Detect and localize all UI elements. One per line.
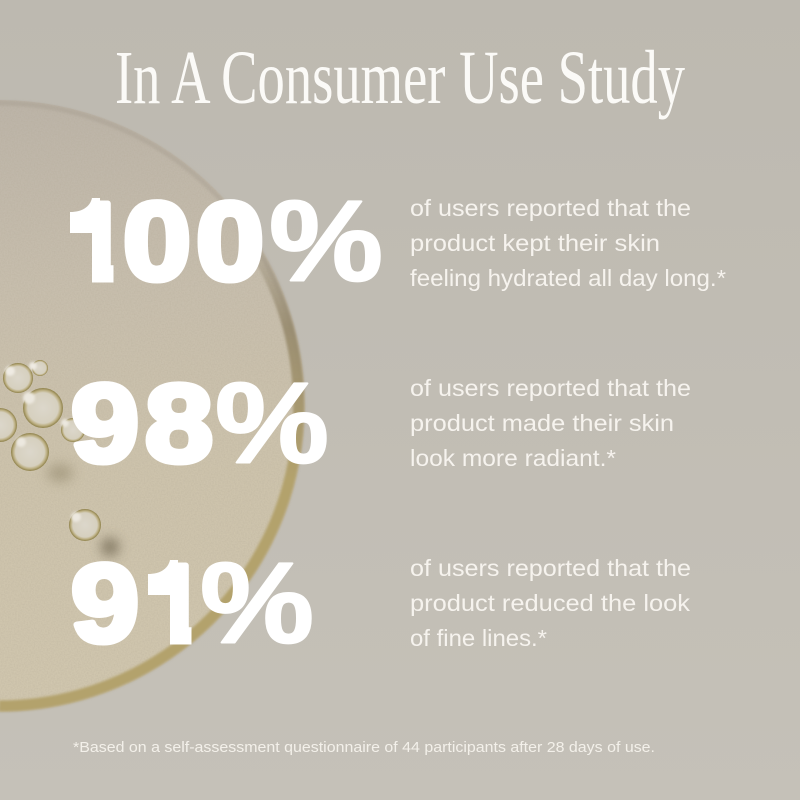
number: 98%: 9	[71, 362, 139, 486]
description: hydrated	[410, 195, 726, 291]
number: 98%: 8	[145, 362, 213, 486]
number: 100%: 0	[123, 180, 191, 304]
description: radiant: look more radiant.*	[410, 445, 616, 471]
stat: 100%	[70, 198, 726, 291]
description: hydrated: of users reported that the	[410, 195, 691, 221]
description: hydrated: product kept their skin	[410, 230, 660, 256]
description: fine lines	[410, 555, 691, 651]
description: fine lines: of users reported that the	[410, 555, 691, 581]
number: 91%: 1	[145, 542, 206, 666]
stat: 98%	[71, 360, 691, 488]
number: 98%	[71, 360, 329, 488]
number: 91%: %	[200, 540, 314, 668]
description: hydrated: feeling hydrated all day long.*	[410, 265, 726, 291]
serum droplet disc	[0, 100, 305, 712]
number: 100%: 1	[67, 180, 128, 304]
bubbles	[0, 360, 119, 556]
stat: 91%	[72, 559, 690, 646]
description: fine lines: product reduced the look	[410, 590, 690, 616]
number: 100%	[70, 198, 381, 284]
description: radiant	[410, 375, 691, 471]
footnote: *Based on a self-assessment questionnaire of 44 participants after 28 days of use.	[73, 739, 655, 756]
number: 91%	[72, 560, 312, 646]
number: 91%: 9	[71, 542, 139, 666]
number: 100%: 0	[196, 180, 264, 304]
number: 98%: %	[215, 360, 329, 488]
description: radiant: of users reported that the	[410, 375, 691, 401]
number: 100%: %	[269, 178, 383, 306]
description: fine lines: of fine lines.*	[410, 625, 547, 651]
description: radiant: product made their skin	[410, 410, 674, 436]
